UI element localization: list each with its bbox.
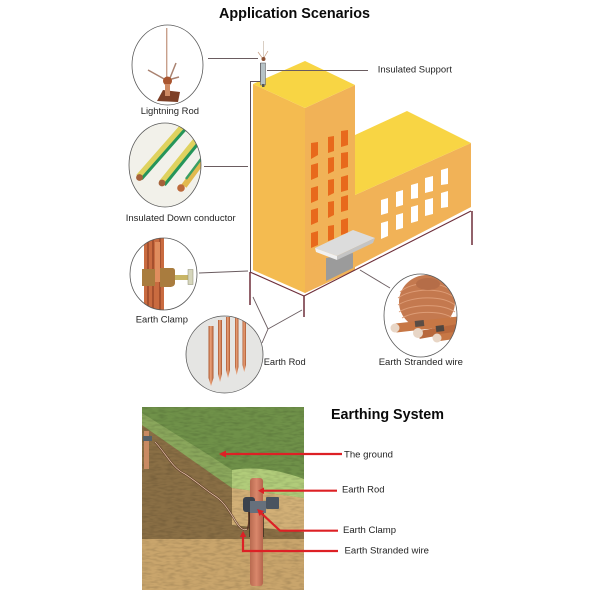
title: Application Scenarios: Application Scenarios (219, 6, 370, 22)
brown soil (142, 425, 304, 539)
label: Insulated Down conductor: Insulated Down conductor (126, 213, 236, 224)
canopy (315, 230, 375, 260)
label: Lightning Rod: Lightning Rod (141, 106, 199, 117)
down conductor (250, 63, 260, 272)
photo circle: earth stranded wire (384, 274, 458, 357)
photo circle: insulated down conductor (129, 123, 203, 207)
pit sand (232, 488, 304, 532)
label: The ground: The ground (344, 450, 393, 460)
main clamp (243, 497, 279, 513)
label: Earth Stranded wire: Earth Stranded wire (379, 357, 463, 368)
label: Earth Stranded wire: Earth Stranded wire (344, 546, 429, 556)
lower sand layer (142, 539, 304, 590)
rod shadow lines (250, 512, 264, 537)
wing front face (305, 143, 471, 293)
label: Earth Rod: Earth Rod (342, 484, 384, 496)
soil texture (142, 407, 304, 590)
building illustration (253, 61, 471, 293)
icon: roof lightning rod and insulated support (258, 41, 268, 87)
tower left face (253, 84, 305, 293)
grass side strip (142, 413, 232, 488)
tower roof (253, 61, 355, 108)
grass surface (142, 407, 304, 532)
pit light grass face (232, 468, 304, 498)
white wing windows (381, 168, 448, 239)
red arrow: earth stranded wire (240, 531, 338, 551)
title: Earthing System: Earthing System (331, 407, 444, 423)
label: Insulated Support: Insulated Support (378, 65, 452, 76)
label: Earth Rod: Earth Rod (264, 357, 306, 368)
tower right face (305, 85, 355, 293)
leader lines (199, 58, 390, 343)
label: Earth Clamp: Earth Clamp (136, 315, 188, 326)
photo circle: earth rods (186, 316, 263, 393)
grounding wire loop and earth rods (250, 211, 472, 317)
main earth rod (250, 478, 263, 586)
panel: earthing system cross-section (142, 407, 304, 590)
photo circle: earth clamp (130, 236, 197, 312)
left clamp (143, 436, 152, 441)
label: Earth Clamp: Earth Clamp (343, 525, 396, 536)
orange tower windows (311, 130, 348, 248)
stranded wire in trench (155, 442, 249, 530)
red arrow: earth clamp (257, 509, 338, 531)
red arrow: the ground (219, 450, 342, 458)
door (326, 253, 353, 281)
wing roof (355, 111, 471, 195)
left earth rod (144, 431, 149, 469)
photo circle: lightning rod (132, 25, 203, 105)
red arrow: earth rod (258, 488, 337, 494)
